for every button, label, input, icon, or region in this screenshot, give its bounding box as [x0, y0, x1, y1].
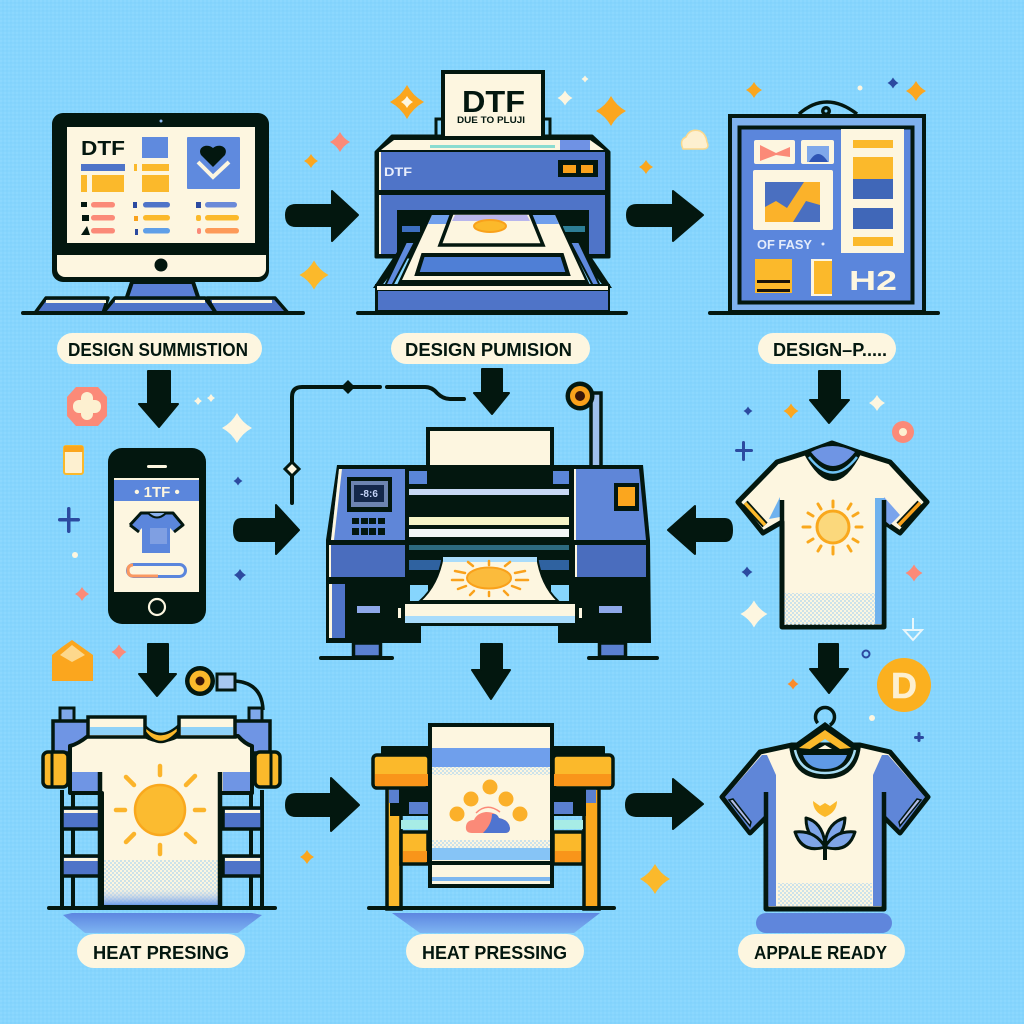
- icon: desktop monitor: [21, 113, 305, 315]
- sparkle group top: [300, 76, 926, 290]
- arrow: printer to central printer: [474, 369, 509, 414]
- sparkle group right: [735, 395, 924, 742]
- label: design submission: DESIGN SUMMISTION: [68, 340, 248, 360]
- icon: heart tile: [187, 137, 240, 189]
- icon: envelope tag: [52, 640, 93, 681]
- status button: [614, 483, 639, 511]
- label: design-p: [758, 333, 896, 364]
- label: heat pressing: [406, 934, 584, 968]
- arrow: heat press to transfer press: [286, 778, 359, 831]
- indicator lights: [558, 160, 598, 177]
- collar: [803, 444, 862, 481]
- collar and hanger: [789, 722, 861, 779]
- side column bars: [841, 129, 904, 253]
- icon: large format printer: [319, 382, 659, 660]
- icon: heat press: [43, 666, 280, 933]
- label: apparel ready: APPALE READY: [754, 943, 887, 963]
- label: design-p: DESIGN–P.....: [773, 340, 887, 360]
- board glyphs: H2: [849, 265, 897, 296]
- phone header text: • 1TF •: [134, 484, 180, 501]
- arrow: shirt to hanger shirt: [810, 644, 848, 693]
- control screen: [347, 477, 392, 512]
- icon: note card: [64, 446, 83, 474]
- printer label: DTF: DTF: [384, 165, 412, 179]
- arrow: board to shirt: [810, 371, 849, 423]
- screen text: DTF: DTF: [81, 138, 125, 160]
- panel: apparel ready: [722, 704, 928, 968]
- label: apparel ready: [738, 934, 905, 968]
- sparkle group left: [58, 394, 670, 894]
- transfer sheet: [430, 725, 552, 886]
- label: design pumision: [391, 333, 590, 364]
- icon: outline down arrow: [904, 618, 922, 640]
- icon: cloud: [682, 130, 708, 149]
- arrow: monitor to printer: [286, 191, 358, 241]
- phone t-shirt: [130, 513, 183, 553]
- sun design: [803, 501, 862, 554]
- paper text: DTF: DTF: [462, 84, 525, 119]
- icon: pink cross badge: [67, 387, 107, 426]
- badge: letter D: [877, 658, 931, 712]
- panel: finished print t-shirt: [738, 443, 927, 627]
- thumbnail: hill: [801, 140, 834, 164]
- printer feet: [319, 643, 659, 660]
- panel: heat press with sheet: [367, 725, 616, 968]
- press frame legs: [60, 790, 264, 908]
- icon: t-shirt with sun: [738, 443, 927, 627]
- keypad: [352, 518, 385, 535]
- label: heat presing: HEAT PRESING: [93, 943, 229, 963]
- heat probe with cable: [185, 666, 263, 710]
- sun design: [116, 766, 204, 854]
- panel: DTF printer: [356, 72, 628, 364]
- cloud and dots design: [450, 780, 528, 833]
- chart panel: [753, 170, 833, 230]
- decorative sparkles and badges: [52, 76, 931, 894]
- arrow: phone to heat press: [139, 644, 176, 696]
- bottom swatches: [755, 259, 832, 296]
- control screen: -8:6: [360, 489, 378, 500]
- arrows between steps: [139, 191, 849, 831]
- panel: monitor design submission: [21, 113, 305, 364]
- panel: phone: [108, 448, 206, 624]
- arrow: monitor to phone: [139, 371, 178, 427]
- arrow: shirt to central printer: [668, 506, 732, 554]
- panel: central printer: [285, 380, 659, 660]
- leaf logo: [795, 801, 855, 860]
- arrow: transfer press to hanger shirt: [626, 779, 703, 829]
- panel: heat press with shirt: [43, 666, 280, 968]
- board text: OF FASY: [757, 238, 813, 252]
- icon: transfer press: [367, 725, 616, 933]
- connector line with nodes: [285, 380, 464, 503]
- shirt on press: [70, 717, 252, 907]
- output roller: [398, 602, 582, 625]
- arrow: printer to board: [627, 191, 703, 241]
- arrow: central printer to press: [472, 644, 510, 699]
- label: heat presing: [77, 934, 245, 968]
- printed sheet with sun: [420, 556, 558, 601]
- icon: smartphone: [108, 448, 206, 624]
- icon: framed board: [708, 102, 940, 315]
- icon: t-shirt on hanger: [722, 704, 928, 909]
- screen blocks: [81, 137, 169, 192]
- arrow: phone to central printer: [234, 505, 299, 554]
- badge: letter D: D: [891, 665, 917, 706]
- icon: printer with paper: [356, 72, 628, 315]
- label: design submission: [57, 333, 262, 364]
- screen list rows: [81, 202, 239, 235]
- thumbnail: bow: [754, 140, 795, 164]
- progress bar: [128, 564, 186, 576]
- label: heat pressing: HEAT PRESSING: [422, 943, 567, 963]
- label: design pumision: DESIGN PUMISION: [405, 340, 572, 360]
- shadow ellipse: [756, 913, 892, 933]
- paper caption: DUE TO PLUJI: [457, 115, 525, 125]
- output tray: [373, 213, 612, 312]
- panel: design board: [708, 102, 940, 364]
